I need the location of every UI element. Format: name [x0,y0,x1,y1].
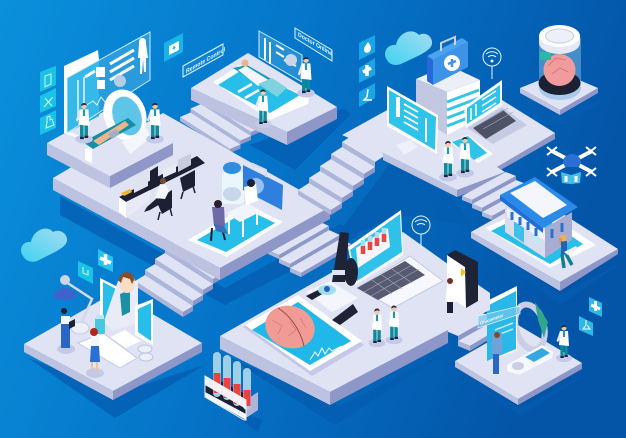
platform: server [342,37,555,197]
test tube rack [205,356,258,420]
stairs: control room to doctor platform [135,242,223,317]
man at phone [492,332,502,374]
wifi icon [483,48,501,79]
stairs: control room to bed platform [180,96,262,153]
icon: first aid tile [164,33,183,62]
platform: central [220,210,490,405]
refrigerator [447,250,478,308]
platform shadows [28,100,622,432]
doctor [556,325,572,362]
nurse at refrigerator [445,278,456,313]
doctor at holographic screen [75,103,93,144]
wall monitor [387,86,438,155]
platform: brain jar [520,25,598,115]
pills [138,345,153,361]
platform: store [471,177,618,291]
tile icons: left column [40,66,56,135]
laptop [464,80,527,144]
wifi icon: central [412,216,430,248]
stairs: server to store [462,172,536,220]
platform: watch and glucometer [455,286,582,405]
woman with red hair [86,328,104,378]
phone app: Glucometer [480,312,504,326]
platform: control room [53,113,330,280]
first aid case [243,164,283,210]
doctor with panel [297,57,315,98]
medicine bottle [222,162,244,204]
brain phone [243,295,364,376]
stairs: central to watch platform [446,312,500,351]
man with tablet [57,308,75,354]
doctors [439,141,457,182]
tablet [450,135,493,163]
control desk [119,153,205,220]
platform: MRI [47,32,173,188]
platform: doctor consultation [24,272,202,400]
nurse [255,90,271,128]
smartwatch [511,301,549,353]
MRI scanner [83,83,154,163]
doctors at laptop [369,309,385,347]
keyboard [78,330,141,368]
cloud [385,31,432,65]
doctor at MRI [146,103,164,144]
stairs: control room to server platform [298,135,386,215]
bottle [95,315,105,334]
tile icons: lower right [579,297,602,336]
phone frame [64,50,99,138]
stairs: control room to central platform [268,221,351,277]
platform: patient bed [191,31,337,145]
brain jar [538,25,581,100]
microscope [306,232,358,325]
woman with tablet [559,234,578,268]
holographic medical screen [67,32,150,133]
server rack [416,65,480,135]
cloud: left [21,229,67,262]
doctor [456,137,474,178]
first aid case [427,37,468,85]
doctor [386,306,402,344]
tile icons: right column [359,35,375,107]
label: Doctor Online: Doctor Online [298,32,333,58]
online doctor [100,272,153,345]
dna data panel [259,31,302,82]
laptop with test tubes [348,210,443,308]
glucometer [507,345,553,375]
shop [500,177,578,258]
desk lamp [54,275,92,334]
phone with bed [213,60,309,120]
drone [547,147,596,184]
label: Remote Control: Remote Control [186,47,225,75]
phone base [485,205,596,268]
phone with consultation [188,179,283,257]
tile icons: lower left [78,249,113,284]
